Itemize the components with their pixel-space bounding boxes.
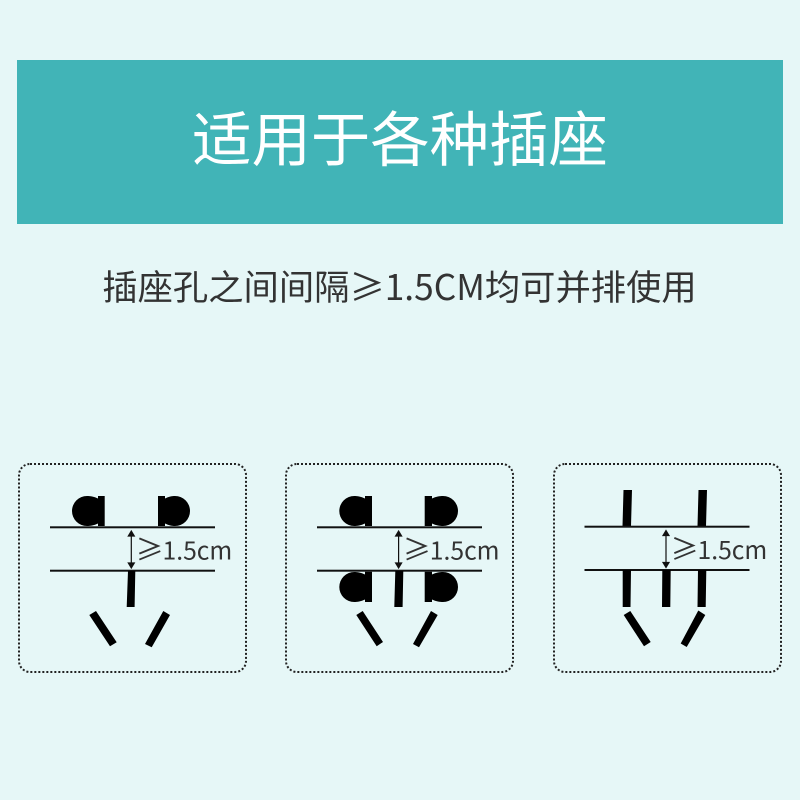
arrow: spacing [128, 531, 134, 568]
spacing label: 1.5cm [430, 532, 500, 568]
title banner [17, 60, 783, 224]
spacing label: ≥ [136, 528, 164, 568]
icon: three flat pins [356, 571, 438, 647]
icon: upper left round pin [339, 496, 372, 526]
icon: right round pin [158, 496, 190, 526]
subtitle: 插座孔之间间隔≥1.5CM均可并排使用 [102, 260, 697, 311]
icon: upper flat pins [622, 490, 707, 526]
spacing label: ≥ [670, 528, 699, 568]
icon: lower left round pin [339, 572, 372, 602]
spacing label: 1.5cm [162, 532, 232, 568]
panel: socket with flat pins on both sides [554, 464, 781, 672]
arrow: spacing [396, 531, 402, 568]
panel: socket with round pins on both sides [286, 464, 513, 672]
spacing label: ≥ [403, 528, 431, 568]
icon: three flat pins [89, 571, 170, 647]
panel: socket with two round pins above [19, 464, 246, 672]
icon: lower flat pins [623, 570, 706, 647]
icon: lower right round pin [425, 572, 458, 602]
spacing label: 1.5cm [698, 531, 767, 567]
arrow: spacing [663, 530, 669, 568]
icon: left round pin [72, 496, 105, 526]
title: 适用于各种插座 [192, 93, 608, 179]
icon: upper right round pin [425, 496, 458, 526]
